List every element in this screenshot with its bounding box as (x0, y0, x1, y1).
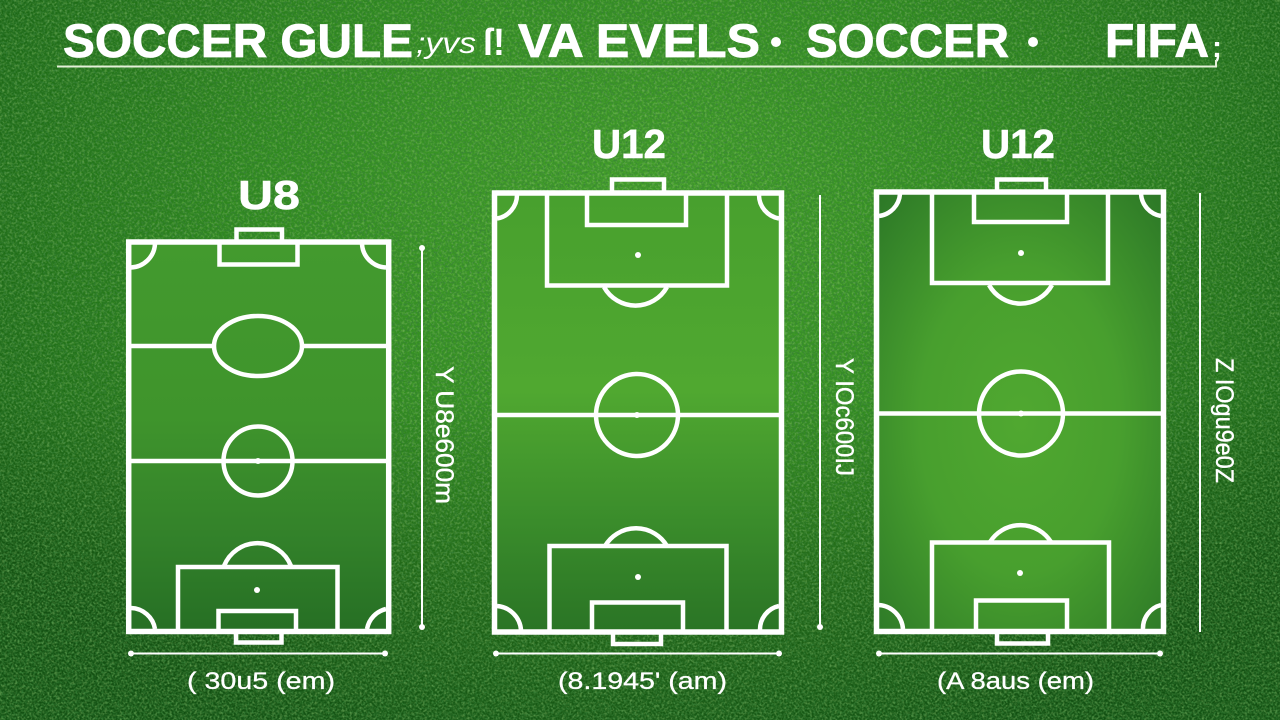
width dimension line (128, 650, 388, 656)
pitch markings (497, 180, 779, 644)
title: VA EVELS (518, 14, 760, 67)
pitch markings (879, 180, 1161, 644)
heading: U8: U8 (238, 172, 300, 218)
width label: (8.1945' (am) (558, 668, 727, 695)
title: SOCCER (806, 14, 1009, 67)
width label: (A 8aus (em) (937, 668, 1094, 695)
height dimension line (419, 245, 425, 630)
title: FIFA (1105, 14, 1209, 67)
height dimension line (1199, 193, 1201, 632)
width label: ( 30u5 (em) (187, 668, 335, 695)
width dimension line (493, 650, 782, 656)
pitch markings (131, 230, 386, 642)
panel: second U12 pitch (876, 121, 1238, 695)
title: ; (1212, 31, 1222, 64)
height dimension line (817, 195, 823, 630)
pitch surface and outline (494, 193, 782, 632)
title: SOCCER GULE (63, 14, 413, 67)
panel: first U12 pitch (493, 121, 858, 695)
height label: Y IOc600IJ (830, 358, 858, 476)
height label: Z IOgu9e0Z (1210, 358, 1238, 483)
pitch surface and outline (876, 192, 1164, 632)
heading: U12: U12 (981, 121, 1055, 167)
height label: Y U8e600m (430, 366, 458, 504)
panel: U8 pitch (128, 172, 458, 695)
title (63, 14, 1222, 67)
title: ;yvs (416, 27, 476, 60)
title underline (57, 60, 1216, 66)
width dimension line (876, 650, 1163, 656)
heading: U12: U12 (592, 121, 666, 167)
pitch surface and outline (129, 242, 389, 632)
title: ſ! (483, 22, 505, 64)
